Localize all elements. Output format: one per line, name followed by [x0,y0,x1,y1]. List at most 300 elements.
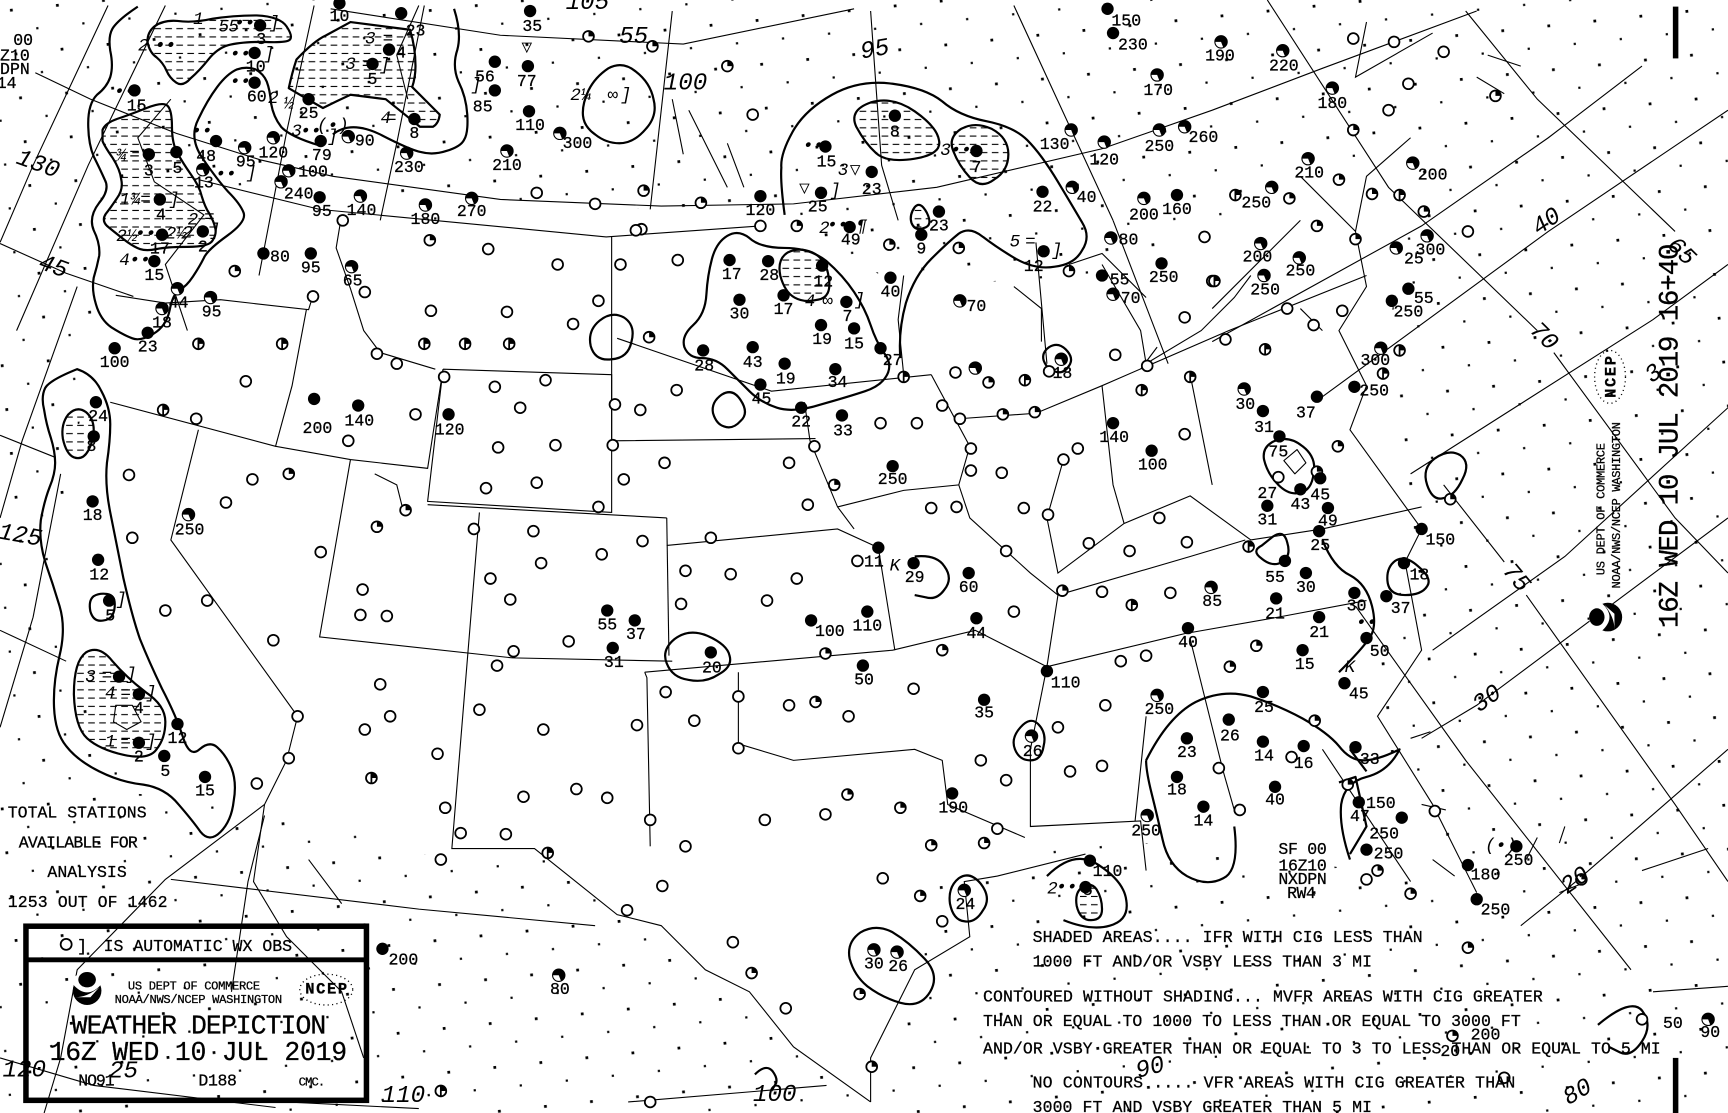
visibility and weather annotations: = [362,55,372,75]
latitude and longitude labels: 90 [1133,1052,1168,1086]
weather stations with ceiling labels: 80 [550,980,570,999]
weather stations with ceiling labels: 120 [435,420,465,439]
weather stations with ceiling labels: 29 [905,568,925,587]
weather stations with ceiling labels: 15 [844,334,864,353]
latitude and longitude labels: 100 [753,1082,797,1109]
icon: rotated NOAA logo [1589,603,1622,631]
visibility and weather annotations: •• [230,45,251,65]
visibility and weather annotations: 1 [193,10,204,30]
weather stations with ceiling labels: 5 [368,70,377,89]
weather stations with ceiling labels: 21 [1265,604,1285,623]
legend notes: AND/OR VSBY GREATER THAN OR EQUAL TO 3 TO LESS THAN OR EQUAL TO 5 MI [983,1039,1661,1058]
visibility and weather annotations: ∞ [822,292,833,312]
icon: NOAA logo [73,972,101,1005]
rotated margin title: 16Z WED 10 JUL 2019 16+40 [1655,244,1686,628]
weather stations with ceiling labels: 15 [127,96,147,115]
latitude and longitude labels: 65 [1661,233,1700,272]
visibility and weather annotations: ] [126,666,136,686]
legend notes [983,928,1661,1113]
weather stations with ceiling labels: 150 [1111,11,1141,30]
visibility and weather annotations: ▽ [799,180,810,200]
weather stations with ceiling labels: 30 [1235,395,1255,414]
visibility and weather annotations: •• [1056,878,1077,898]
weather stations with ceiling labels: 100 [1138,456,1168,475]
weather stations with ceiling labels: 100 [815,622,845,641]
weather stations with ceiling labels: 180 [1471,865,1500,884]
weather stations with ceiling labels: 30 [1296,578,1316,597]
weather stations with ceiling labels: 12 [813,273,833,292]
icon: NCEP logo [300,974,353,1005]
weather stations with ceiling labels: 60 [247,87,267,106]
weather stations with ceiling labels: 85 [473,97,493,116]
weather stations with ceiling labels: 5 [173,159,182,178]
visibility and weather annotations: •• [803,137,824,157]
weather stations with ceiling labels: 250 [175,521,204,540]
weather stations with ceiling labels: 8 [409,124,419,143]
weather stations with ceiling labels: 40 [1077,188,1097,207]
weather stations with ceiling labels: 18 [83,506,103,525]
latitude and longitude labels: 30 [1468,680,1507,719]
weather stations with ceiling labels: 90 [355,132,375,151]
station count note [8,804,168,912]
visibility and weather annotations: = [120,733,131,753]
weather stations with ceiling labels: 45 [1310,485,1330,504]
visibility and weather annotations: ] [471,76,481,96]
weather stations with ceiling labels: 60 [959,578,979,597]
product codes: NO91 [78,1071,115,1090]
weather stations with ceiling labels: 250 [1149,268,1179,287]
weather stations with ceiling labels: 90 [1700,1023,1720,1042]
weather stations with ceiling labels: 22 [1033,198,1052,217]
weather stations with ceiling labels: 110 [852,616,882,635]
weather stations with ceiling labels: 25 [808,198,828,217]
automatic observation key: IS AUTOMATIC WX OBS [104,937,292,956]
visibility and weather annotations: = [140,191,151,211]
weather stations with ceiling labels: 23 [862,180,882,199]
weather stations with ceiling labels: 14 [1254,746,1274,765]
visibility and weather annotations: 3 [940,141,951,161]
weather stations with ceiling labels: 250 [1241,193,1271,212]
visibility and weather annotations: ▽ [521,38,532,58]
rotated NCEP logo: NCEP [1603,356,1621,398]
rotated agency lines [1595,422,1624,588]
latitude and longitude labels: 95 [858,35,892,67]
visibility and weather annotations: •• [230,73,251,93]
weather stations with ceiling labels: 230 [1118,36,1148,55]
weather stations with ceiling labels: 55 [597,615,617,634]
weather stations with ceiling labels: 95 [312,202,332,221]
visibility and weather annotations: 2 [819,219,830,239]
visibility and weather annotations: 5 [1010,232,1021,252]
weather stations with ceiling labels: 35 [974,703,994,722]
weather stations with ceiling labels: 210 [1294,164,1324,183]
legend notes: THAN OR EQUAL TO 1000 TO LESS THAN OR EQUAL TO 3000 FT [983,1012,1521,1031]
weather stations with ceiling labels: 2 [134,748,144,767]
weather stations with ceiling labels: 31 [1254,418,1274,437]
visibility and weather annotations: 5 [218,18,229,38]
weather stations with ceiling labels: 230 [394,158,424,177]
weather stations with ceiling labels: 110 [515,116,545,135]
weather stations with ceiling labels: 200 [1129,205,1159,224]
surface forecast block [1278,840,1327,903]
weather stations with ceiling labels: 250 [1394,302,1423,321]
visibility and weather annotations: ∞ [607,86,618,106]
station count note: ANALYSIS [47,863,127,882]
visibility and weather annotations: •• [129,251,151,271]
weather stations with ceiling labels: 170 [1143,81,1173,100]
weather stations with ceiling labels: 10 [246,58,266,77]
weather stations with ceiling labels: 43 [1290,495,1310,514]
visibility and weather annotations: ] [116,591,127,611]
weather stations with ceiling labels: 12 [89,566,109,585]
latitude and longitude labels: 100 [664,70,707,97]
weather stations with ceiling labels: 150 [1366,794,1396,813]
weather stations with ceiling labels: 20 [702,658,722,677]
latitude and longitude labels: 120 [2,1058,46,1085]
visibility and weather annotations: ] [328,128,338,148]
weather stations with ceiling labels: 27 [1257,484,1277,503]
weather stations with ceiling labels: 250 [1144,137,1174,156]
weather stations with ceiling labels: 16 [1294,754,1314,773]
visibility and weather annotations: ¶ [857,217,868,237]
latitude and longitude labels: 20 [1556,862,1596,901]
visibility and weather annotations: ] [621,86,631,106]
map title: 16Z WED 10 JUL 2019 [50,1038,347,1068]
weather stations with ceiling labels: 10 [330,7,349,26]
weather stations with ceiling labels: 49 [1318,512,1338,531]
weather stations with ceiling labels: 49 [841,231,861,250]
weather stations with ceiling labels: 250 [1374,845,1403,864]
weather stations with ceiling labels: 18 [1409,566,1429,585]
weather stations with ceiling labels: 2 [198,237,208,256]
weather stations with ceiling labels: 25 [1310,536,1330,555]
map title [50,1012,347,1068]
weather stations with ceiling labels: 150 [1425,530,1455,549]
weather stations with ceiling labels: 24 [88,407,108,426]
page corner marks [1673,7,1678,1113]
rotated NCEP logo [1595,350,1625,403]
weather stations with ceiling labels: 200 [1471,1025,1500,1044]
weather stations with ceiling labels: 22 [791,413,811,432]
visibility and weather annotations: (•) [317,117,349,137]
weather stations with ceiling labels: 50 [854,670,874,689]
visibility and weather annotations: ] [854,291,865,311]
visibility and weather annotations: = [204,208,215,228]
weather stations with ceiling labels: 140 [344,411,374,430]
visibility and weather annotations: ¾ [116,146,127,166]
run identifier top left: 00 [13,31,33,50]
weather stations with ceiling labels: 15 [144,266,164,285]
run identifier top left: Z10 [0,47,30,66]
weather stations with ceiling labels: 100 [298,162,328,181]
weather stations with ceiling labels: 17 [722,265,742,284]
weather stations with ceiling labels: 30 [730,305,749,324]
visibility and weather annotations: ] [264,45,274,65]
surface forecast block: RW4 [1287,884,1316,903]
weather stations with ceiling labels: 43 [743,353,763,372]
weather stations with ceiling labels: 250 [878,470,908,489]
weather stations with ceiling labels: 220 [1269,57,1299,76]
weather stations with ceiling labels: 28 [694,356,714,375]
visibility and weather annotations: 2¼ [570,86,592,106]
weather stations with ceiling labels: 12 [1024,257,1044,276]
weather stations with ceiling labels: 300 [1360,351,1390,370]
weather stations with ceiling labels: 95 [236,152,256,171]
weather stations with ceiling labels: 180 [411,210,440,229]
visibility and weather annotations: K [1345,658,1357,678]
weather stations with ceiling labels: 250 [1286,262,1315,281]
visibility and weather annotations: 4 [805,292,815,312]
visibility and weather annotations: 3 [291,122,302,142]
visibility and weather annotations: ] [210,221,220,241]
visibility and weather annotations: 2 [1047,879,1058,899]
weather stations with ceiling labels: 18 [152,313,172,332]
weather stations with ceiling labels: 5 [1083,881,1093,900]
product codes [78,1071,325,1090]
weather stations with ceiling labels: 40 [881,283,900,302]
legend notes: NO CONTOURS .... VFR AREAS WITH CIG GREATER THAN [1033,1074,1515,1093]
weather stations with ceiling labels: 250 [1369,825,1399,844]
weather stations with ceiling labels: 180 [1317,94,1347,113]
weather stations with ceiling labels: 20 [1440,1042,1460,1061]
weather stations with ceiling labels: 190 [938,798,968,817]
weather stations with ceiling labels: 11 [864,553,884,572]
weather stations with ceiling labels: 200 [389,950,418,969]
weather stations with ceiling labels: 120 [258,144,288,163]
visibility and weather annotations: 2 [268,89,279,109]
weather stations with ceiling labels: 23 [138,338,158,357]
weather stations with ceiling labels: 70 [966,297,986,316]
weather stations with ceiling labels: 19 [812,330,832,349]
title box [25,926,366,1100]
latitude and longitude labels: 70 [1523,317,1563,357]
visibility and weather annotations: = [1025,232,1036,252]
run identifier top left [0,31,33,93]
weather stations with ceiling labels: 26 [1220,727,1240,746]
visibility and weather annotations: = [383,30,393,50]
weather stations with ceiling labels: 15 [817,152,836,171]
weather stations with ceiling labels: 40 [1178,633,1198,652]
rotated agency lines: US DEPT OF COMMERCE [1595,443,1609,575]
weather stations with ceiling labels: 200 [303,419,332,438]
agency lines: US DEPT OF COMMERCE [128,980,260,994]
weather stations with ceiling labels: 33 [833,421,853,440]
visibility and weather annotations: 3 [85,668,96,688]
weather stations with ceiling labels: 17 [774,300,793,319]
weather stations with ceiling labels: 37 [626,625,646,644]
latitude and longitude labels: 45 [35,250,71,285]
visibility and weather annotations: •• [215,165,237,185]
visibility and weather annotations: •• [950,141,972,161]
weather stations with ceiling labels: 31 [604,653,624,672]
weather stations with ceiling labels: 7 [971,158,981,177]
visibility and weather annotations: ] [246,164,257,184]
weather stations with ceiling labels: 27 [883,351,903,370]
visibility and weather annotations: 4 [119,251,130,271]
agency lines [115,980,282,1007]
weather stations with ceiling labels: 65 [343,272,363,291]
weather stations with ceiling labels: 160 [1162,200,1192,219]
visibility and weather annotations: 1 [105,733,116,753]
weather stations with ceiling labels: 30 [864,955,884,974]
weather stations with ceiling labels: 35 [522,17,542,36]
run identifier top left: DPN [0,60,30,79]
weather stations with ceiling labels: 23 [929,216,949,235]
visibility and weather annotations: •• [300,122,321,142]
station count note: AVAILABLE FOR [19,833,138,852]
visibility and weather annotations: 2 [182,224,193,244]
weather stations with ceiling labels: 44 [966,624,986,643]
weather stations with ceiling labels: 240 [284,184,314,203]
visibility and weather annotations: 5 [228,18,239,38]
weather stations with ceiling labels: 37 [1391,599,1411,618]
weather stations with ceiling labels: 200 [1418,166,1447,185]
surface forecast block: SF 00 [1278,840,1327,859]
weather stations with ceiling labels: 110 [1093,862,1122,881]
weather stations with ceiling labels: 56 [475,68,495,87]
weather stations with ceiling labels: 50 [1370,642,1390,661]
weather stations with ceiling labels: 18 [1052,364,1072,383]
weather stations with ceiling labels: 300 [1416,241,1445,260]
weather stations with ceiling labels: 44 [169,294,189,313]
visibility and weather annotations: 2½ [166,225,187,245]
weather stations with ceiling labels: 250 [1250,280,1280,299]
visibility and weather annotations: ] [379,56,390,76]
visibility and weather annotations [85,10,1517,899]
latitude and longitude labels: 40 [1528,203,1567,242]
legend notes: CONTOURED WITHOUT SHADING... MVFR AREAS WITH CIG GREATER [983,988,1543,1007]
weather stations with ceiling labels: 5 [160,762,170,781]
weather stations with ceiling labels: 140 [347,201,376,220]
surface forecast block: NXDPN [1278,870,1327,889]
weather stations with ceiling labels: 260 [1189,128,1218,147]
visibility and weather annotations: 2 [188,210,198,230]
weather stations with ceiling labels: 75 [1268,442,1288,461]
weather stations with ceiling labels: 15 [195,782,215,801]
agency lines: NOAA/NWS/NCEP WASHINGTON [115,993,282,1007]
weather stations with ceiling labels: 80 [270,247,290,266]
weather stations with ceiling labels: 140 [1099,428,1129,447]
weather stations with ceiling labels: 17 [150,240,170,259]
weather stations with ceiling labels: 85 [1202,592,1222,611]
weather stations with ceiling labels: 190 [1205,47,1235,66]
weather stations with ceiling labels: 250 [1359,382,1389,401]
weather stations with ceiling labels: 47 [1350,807,1370,826]
weather stations with ceiling labels: 79 [312,146,332,165]
visibility and weather annotations: ] [146,733,156,753]
weather stations with ceiling labels: 23 [1177,743,1197,762]
visibility and weather annotations: •• [191,122,212,142]
weather stations with ceiling labels: 110 [1051,674,1081,693]
station count note: 1253 OUT OF 1462 [8,893,168,912]
weather stations with ceiling labels: 24 [955,895,975,914]
weather stations with ceiling labels: 100 [100,353,130,372]
weather stations with ceiling labels: 21 [1309,623,1329,642]
visibility and weather annotations: ] [169,191,179,211]
weather stations with ceiling labels: 34 [828,373,848,392]
visibility and weather annotations: ▽ [850,161,861,181]
weather stations with ceiling labels: 23 [406,21,425,40]
product codes: CMC. [299,1075,325,1089]
visibility and weather annotations: 3 [838,161,848,181]
latitude and longitude labels: 75 [1496,559,1535,598]
weather stations with ceiling labels: 250 [1131,821,1161,840]
station count note: TOTAL STATIONS [8,804,147,823]
weather stations with ceiling labels: 26 [1023,742,1043,761]
visibility and weather annotations: ½ [283,95,294,115]
weather stations with ceiling labels: 77 [517,72,537,91]
weather stations with ceiling labels: 120 [1089,150,1119,169]
weather stations with ceiling labels: 13 [194,173,214,192]
latitude and longitude labels: 55 [619,24,648,51]
weather stations with ceiling labels: 55 [1265,568,1285,587]
weather stations with ceiling labels: 80 [1119,231,1138,250]
visibility and weather annotations: •• [234,14,255,34]
weather stations with ceiling labels: 14 [1193,811,1213,830]
legend notes: 1000 FT AND/OR VSBY LESS THAN 3 MI [1033,952,1372,971]
automatic observation key: ] [77,937,87,956]
visibility and weather annotations: ] [269,14,280,34]
shaded IFR areas [62,15,1102,920]
visibility and weather annotations: 2½ [116,227,138,247]
weather stations with ceiling labels: 120 [746,201,775,220]
visibility and weather annotations: •• [135,225,156,245]
weather stations with ceiling labels: 210 [492,156,522,175]
weather stations with ceiling labels: 250 [1504,851,1533,870]
map title: WEATHER DEPICTION [72,1012,326,1042]
latitude and longitude labels: 80 [1559,1074,1597,1112]
visibility and weather annotations: 1¾ [120,191,141,211]
visibility and weather annotations: 3 [365,30,376,50]
weather stations with ceiling labels: 50 [1663,1014,1683,1033]
weather stations with ceiling labels: 55 [1414,289,1434,308]
visibility and weather annotations: ] [830,182,841,202]
weather stations with ceiling labels: 48 [196,147,216,166]
visibility and weather annotations: 3 [345,55,356,75]
weather stations with ceiling labels: 31 [1257,511,1277,530]
visibility and weather annotations: ] [146,684,156,704]
visibility and weather annotations: •• [1356,614,1377,634]
visibility and weather annotations: = [102,667,112,687]
icon: NCEP logo: NCEP [305,981,347,999]
weather stations with ceiling labels: 70 [1121,289,1141,308]
weather stations with ceiling labels: 4 [156,205,166,224]
weather stations with ceiling labels: 28 [759,266,779,285]
rotated agency lines: NOAA/NWS/NCEP WASHINGTON [1610,422,1624,588]
weather stations with ceiling labels: 9 [916,240,926,259]
weather stations with ceiling labels: 250 [1144,700,1174,719]
weather stations with ceiling labels: 25 [1254,698,1274,717]
weather stations with ceiling labels: 12 [168,729,187,748]
weather stations with ceiling labels: 18 [1167,781,1187,800]
weather stations with ceiling labels: 270 [457,202,487,221]
weather stations with ceiling labels: 26 [888,957,908,976]
visibility and weather annotations: •• [114,83,135,103]
weather stations with ceiling labels: 5 [105,607,115,626]
visibility and weather annotations: •• [155,36,176,56]
weather stations with ceiling labels: 45 [1349,685,1369,704]
weather stations with ceiling labels: 40 [1265,791,1285,810]
visibility and weather annotations: K [890,556,902,576]
weather stations with ceiling labels: 19 [776,370,796,389]
weather stations with ceiling labels: 95 [301,258,321,277]
weather stations with ceiling labels: 3 [144,161,154,180]
weather stations with ceiling labels: 95 [202,302,222,321]
weather stations with ceiling labels: 130 [1040,135,1070,154]
weather stations with ceiling labels: 15 [1295,655,1315,674]
weather stations with ceiling labels: 7 [843,307,852,326]
latitude and longitude labels: 3 [1640,359,1668,390]
